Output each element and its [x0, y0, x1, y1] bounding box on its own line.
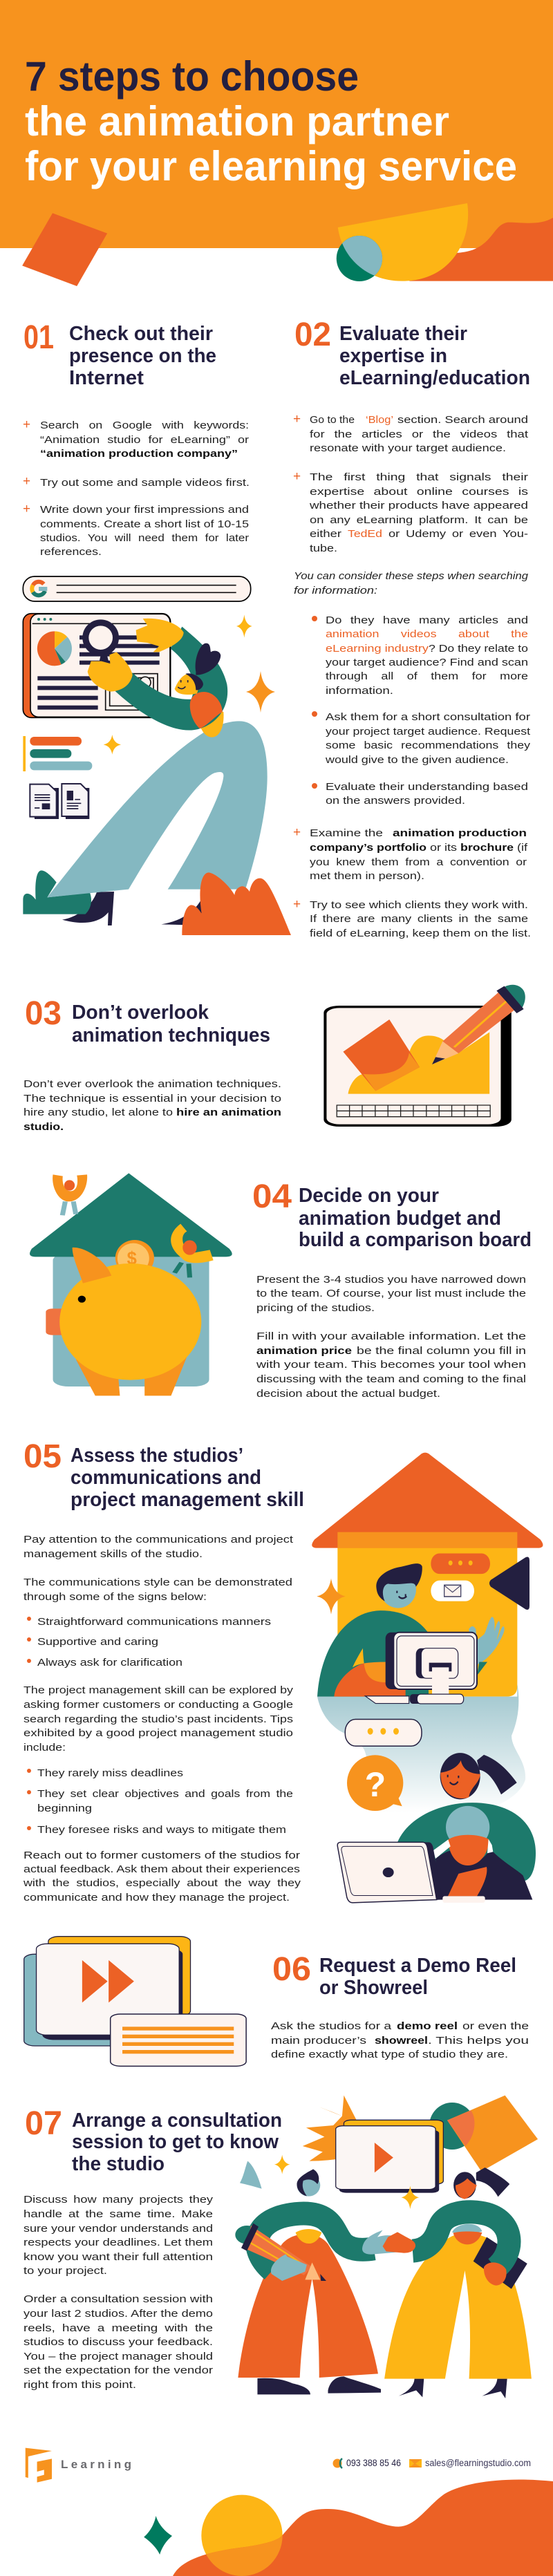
body text 07: handle at the same time. Make	[24, 2209, 213, 2220]
body text 03: Don’t ever overlook the animation techniques.	[24, 1079, 281, 1090]
email: sales@flearningstudio.com	[425, 2458, 531, 2468]
bullet list 02: for information:	[294, 585, 377, 596]
body text 06: showreel	[375, 2036, 428, 2047]
heading 02	[339, 323, 530, 389]
coin	[115, 1240, 154, 1276]
bullet list 02: tube.	[310, 543, 337, 554]
bullet list 01	[23, 417, 250, 558]
body text 05: Reach out to former customers of the studios for	[24, 1850, 300, 1861]
heading 03	[72, 1002, 270, 1046]
panel: step 04	[30, 1173, 532, 1400]
bullet list 01: references.	[40, 547, 102, 558]
magnifying glass and hands	[86, 619, 184, 692]
woman character	[397, 1753, 536, 1903]
bullet list 02: you knew them from a convention or	[310, 857, 527, 868]
heading 01: presence on the	[69, 345, 216, 367]
heading 04: Decide on your	[299, 1185, 439, 1207]
heading 01	[69, 323, 216, 389]
bullet list 02: for the articles or the videos that	[310, 429, 528, 440]
typing bubble	[345, 1720, 422, 1746]
body text 07: right from this point.	[24, 2380, 136, 2391]
body text 05: They set clear objectives and goals from the	[37, 1789, 293, 1800]
bullet list 01: comments. Create a short list of 10-15	[40, 519, 249, 530]
step number 05: 05	[24, 1438, 62, 1475]
yellow bird	[171, 1224, 214, 1263]
decorative header shapes	[22, 203, 553, 286]
bullet list 02: Do they have many articles and	[326, 615, 528, 626]
bullet list 02: on any eLearning platform. It can be	[310, 515, 528, 526]
heading 07	[72, 2109, 282, 2175]
woman character	[384, 2168, 532, 2398]
panel: step 01	[23, 319, 291, 935]
bullet list 02: some basic recommendations they	[326, 740, 531, 751]
bullet list 02: your target audience? Find and scan	[326, 657, 528, 668]
bullet list 02: TedEd	[348, 529, 382, 540]
body text 05: actual feedback. Ask them about their experiences	[24, 1864, 300, 1875]
body text 05: with the studios, especially about the way they	[23, 1878, 301, 1889]
person character	[23, 627, 268, 925]
bullet list 02: on the answers provided.	[326, 796, 465, 807]
house	[312, 1453, 543, 1697]
question bubble: ?	[365, 1765, 386, 1804]
decorative footer shapes	[144, 2479, 553, 2576]
body text 04: Fill in with your available information. Let the	[256, 1331, 526, 1342]
body text 05: management skills of the studio.	[24, 1549, 203, 1560]
sparkles	[104, 614, 275, 755]
bullet list 02: Go to the	[310, 415, 355, 426]
bullet list 02: met them in person).	[310, 871, 424, 882]
body text 05: Supportive and caring	[37, 1637, 158, 1648]
body text 03: hire an animation	[176, 1107, 281, 1118]
body text 05: include:	[24, 1742, 66, 1754]
search bar with Google logo	[23, 576, 251, 601]
bullet list 01: studios. You will need them for later	[40, 533, 249, 544]
body text 05: They rarely miss deadlines	[37, 1768, 183, 1779]
body text 04: animation price	[256, 1346, 352, 1357]
title: 7 steps to choose	[25, 53, 359, 100]
body text 07: studios to discuss your feedback.	[24, 2337, 213, 2348]
body text 04	[256, 1275, 526, 1400]
heading 05: project management skill	[71, 1489, 304, 1511]
body text 06: Ask the studios for a	[271, 2021, 392, 2032]
fast-forward icon	[82, 1960, 134, 2002]
body text 07: know you want their full attention	[24, 2252, 213, 2263]
heading 02: Evaluate their	[339, 323, 467, 345]
bullet list 01: +	[23, 474, 30, 489]
piggy bank	[46, 1248, 201, 1395]
body text 05: Pay attention to the communications and project	[24, 1534, 293, 1545]
man character	[235, 2169, 381, 2394]
body text 07: to your project.	[24, 2266, 107, 2277]
panel: header band	[0, 0, 553, 286]
body text 07: Discuss how many projects they	[24, 2194, 214, 2206]
bullet list 02: brochure	[460, 843, 514, 854]
video player	[336, 2120, 443, 2193]
bullet list 02: expertise about online courses is	[310, 487, 528, 498]
bullet list 02: +	[293, 897, 301, 912]
illustration: remote communication	[312, 1453, 543, 1903]
legend bars	[23, 736, 92, 771]
bullet list 01: “animation production company”	[40, 449, 238, 460]
body text 05: asking former customers or conducting a Google	[24, 1700, 293, 1711]
step number 07: 07	[25, 2105, 62, 2142]
bullet list 02: +	[293, 412, 301, 426]
bullet list 02: your project target audience. Request	[326, 726, 530, 737]
body text 06: main producer’s	[271, 2036, 366, 2047]
body text 05: exhibited by a good project management studio	[24, 1728, 293, 1739]
body text 07: You – the project manager should	[24, 2351, 213, 2362]
body text 05: Always ask for clarification	[37, 1657, 182, 1668]
bullet list 02: animation videos about the	[326, 629, 528, 640]
heading 02: eLearning/education	[339, 367, 530, 389]
bullet list 02: Ask them for a short consultation for	[326, 712, 530, 723]
heading 01: Internet	[69, 367, 144, 389]
mail icon	[409, 2459, 422, 2467]
body text 06	[271, 2021, 529, 2060]
body text 07: Order a consultation session with	[24, 2294, 213, 2305]
bullet list 02: Try to see which clients they work with.	[310, 900, 528, 911]
illustration: handshake	[235, 2096, 538, 2398]
browser window	[23, 614, 171, 717]
heading 04: build a comparison board	[299, 1229, 532, 1251]
bullet list 01: +	[23, 502, 30, 516]
title: for your elearning service	[25, 143, 517, 189]
man character	[317, 1563, 505, 1697]
heading 06: Request a Demo Reel	[319, 1955, 516, 1977]
handshake	[362, 2230, 415, 2255]
heading 07: Arrange a consultation	[72, 2109, 282, 2132]
panel: step 06	[24, 1937, 529, 2066]
bullet list 02: information.	[326, 686, 393, 697]
step number 01: 01	[24, 319, 54, 356]
logo mark	[26, 2448, 52, 2483]
body text 05	[23, 1534, 301, 1903]
title	[25, 53, 517, 189]
bullet list 02: eLearning industry	[326, 643, 429, 655]
illustration: search person	[23, 576, 291, 935]
bullet list 01: Write down your first impressions and	[40, 505, 249, 516]
body text 04: pricing of the studios.	[256, 1303, 375, 1314]
heading 05: communications and	[71, 1467, 261, 1489]
heading 04	[299, 1185, 532, 1251]
body text 04: Present the 3-4 studios you have narrowed down	[256, 1275, 526, 1286]
body text 04: to the team. Of course, your list must include the	[256, 1288, 526, 1299]
body text 07: reels, have a meeting with the	[24, 2323, 213, 2334]
bullet list 02: section. Search around	[397, 415, 528, 426]
step number 03: 03	[25, 995, 62, 1032]
panel: footer	[26, 2448, 553, 2576]
bullet list 01: Search on Google with keywords:	[40, 420, 249, 431]
bullet list 02: either	[310, 529, 341, 540]
chat bubbles	[431, 1553, 490, 1601]
foreground bush	[182, 872, 291, 935]
contact details	[333, 2458, 531, 2468]
body text 03: hire any studio, let alone to	[24, 1107, 173, 1118]
heading 01: Check out their	[69, 323, 213, 345]
heading 03: animation techniques	[72, 1024, 270, 1046]
background shapes	[240, 2096, 538, 2189]
illustration: piggy bank house	[30, 1173, 232, 1395]
heading 05: Assess the studios’	[71, 1445, 243, 1467]
body text 05: through some of the signs below:	[24, 1592, 207, 1603]
heading 02: expertise in	[339, 345, 447, 367]
body text 06: demo reel	[397, 2021, 458, 2032]
body text 04: be the final column you fill in	[357, 1346, 526, 1357]
body text 03: studio.	[24, 1122, 64, 1133]
body text 07: set the expectation for the vendor	[24, 2365, 213, 2376]
bullet list 02: (if	[517, 843, 528, 854]
bullet list 02: resonate with your target audience.	[310, 443, 506, 454]
caption card	[111, 2014, 246, 2066]
body text 05: search regarding the studio’s past incidents. Tips	[24, 1714, 293, 1725]
bullet list 02: ‘Blog’	[366, 415, 393, 426]
question bubble	[347, 1755, 403, 1811]
body text 07: sure your vendor understands and	[24, 2224, 213, 2235]
birds	[53, 1174, 189, 1277]
phone icon	[333, 2459, 342, 2468]
body text 04: with your team. This becomes your tool when	[256, 1360, 526, 1371]
bullet list 02: +	[293, 825, 301, 840]
heading 06: or Showreel	[319, 1977, 428, 1999]
body text 04: decision about the actual budget.	[256, 1389, 440, 1400]
document icons	[30, 784, 89, 819]
orange band	[0, 0, 553, 248]
heading 06	[319, 1955, 516, 1999]
panel: step 07	[24, 2096, 538, 2398]
bullet list 02: +	[293, 469, 301, 484]
coin: $	[127, 1248, 137, 1268]
body text 05: communicate and how they manage the project.	[24, 1892, 290, 1903]
sparkle	[317, 1578, 346, 1615]
body text 05: The communications style can be demonstrated	[24, 1577, 292, 1588]
illustration: video cards	[24, 1937, 246, 2066]
bullet list 02: whether their products have appeared	[309, 500, 528, 511]
heading 05	[71, 1445, 304, 1511]
panel: step 05	[23, 1438, 543, 1903]
bullet list 02: or its	[430, 843, 457, 854]
bullet list 02: field of eLearning, keep them on the list.	[310, 928, 531, 939]
bullet list 02	[293, 412, 531, 939]
dark triangle	[489, 1557, 529, 1610]
body text 05: They foresee risks and ways to mitigate them	[37, 1825, 286, 1836]
heading 07: session to get to know	[72, 2131, 279, 2153]
bullet list 02: You can consider these steps when searching	[294, 571, 529, 582]
illustration: tablet and pencil	[324, 985, 525, 1127]
body text 06: . This helps you	[428, 2036, 529, 2047]
bullet list 02: through all of them for more	[326, 671, 528, 682]
bullet list 02: would give to the given audience.	[325, 755, 509, 766]
bullet list 02: or Udemy or even You-	[388, 529, 528, 540]
bullet list 02: Evaluate their understanding based	[326, 782, 528, 793]
bullet list 02: ? Do they relate to	[429, 643, 528, 655]
bullet list 02: company’s portfolio	[310, 843, 427, 854]
bullet list 01: Try out some and sample videos first.	[40, 478, 250, 489]
water shape	[317, 1684, 525, 1812]
body text 05: beginning	[37, 1803, 92, 1814]
panel: step 03	[24, 985, 525, 1133]
pencil	[432, 985, 525, 1064]
body text 04: discussing with the team and coming to the final	[256, 1374, 526, 1385]
step number 02: 02	[294, 317, 331, 353]
body text 03	[24, 1079, 281, 1133]
body text 07	[24, 2194, 214, 2391]
body text 03: The technique is essential in your decision to	[24, 1093, 281, 1104]
bullet list 02: Examine the	[310, 828, 383, 839]
heading 03: Don’t overlook	[72, 1002, 209, 1024]
body text 06: define exactly what type of studio they are.	[271, 2049, 508, 2060]
body text 06: or even the	[462, 2021, 529, 2032]
body text 07: your last 2 studios. After the demo	[24, 2309, 213, 2320]
heading 07: the studio	[72, 2153, 165, 2175]
bullet list 02: If there are many clients in the same	[310, 914, 528, 925]
heading 04: animation budget and	[299, 1207, 501, 1230]
body text 05: Straightforward communications manners	[37, 1617, 271, 1628]
house	[30, 1173, 232, 1386]
body text 07: respects your deadlines. Let them	[24, 2237, 213, 2248]
title: the animation partner	[25, 98, 449, 144]
panel: step 02	[293, 317, 531, 939]
bullet list 02: The first thing that signals their	[310, 472, 528, 483]
bullet list 01: “Animation studio for eLearning” or	[40, 435, 249, 446]
sparkle	[402, 2186, 419, 2209]
step number 06: 06	[272, 1951, 311, 1988]
logo wordmark: Learning	[61, 2458, 131, 2471]
bullet list 02: animation production	[393, 828, 527, 839]
logo	[26, 2448, 131, 2483]
body text 05: The project management skill can be explored by	[24, 1685, 294, 1696]
step number 04: 04	[252, 1178, 292, 1215]
desktop monitor	[365, 1633, 477, 1704]
phone number: 093 388 85 46	[346, 2458, 401, 2468]
laptop	[337, 1842, 442, 1903]
bullet list 01: +	[23, 417, 30, 432]
